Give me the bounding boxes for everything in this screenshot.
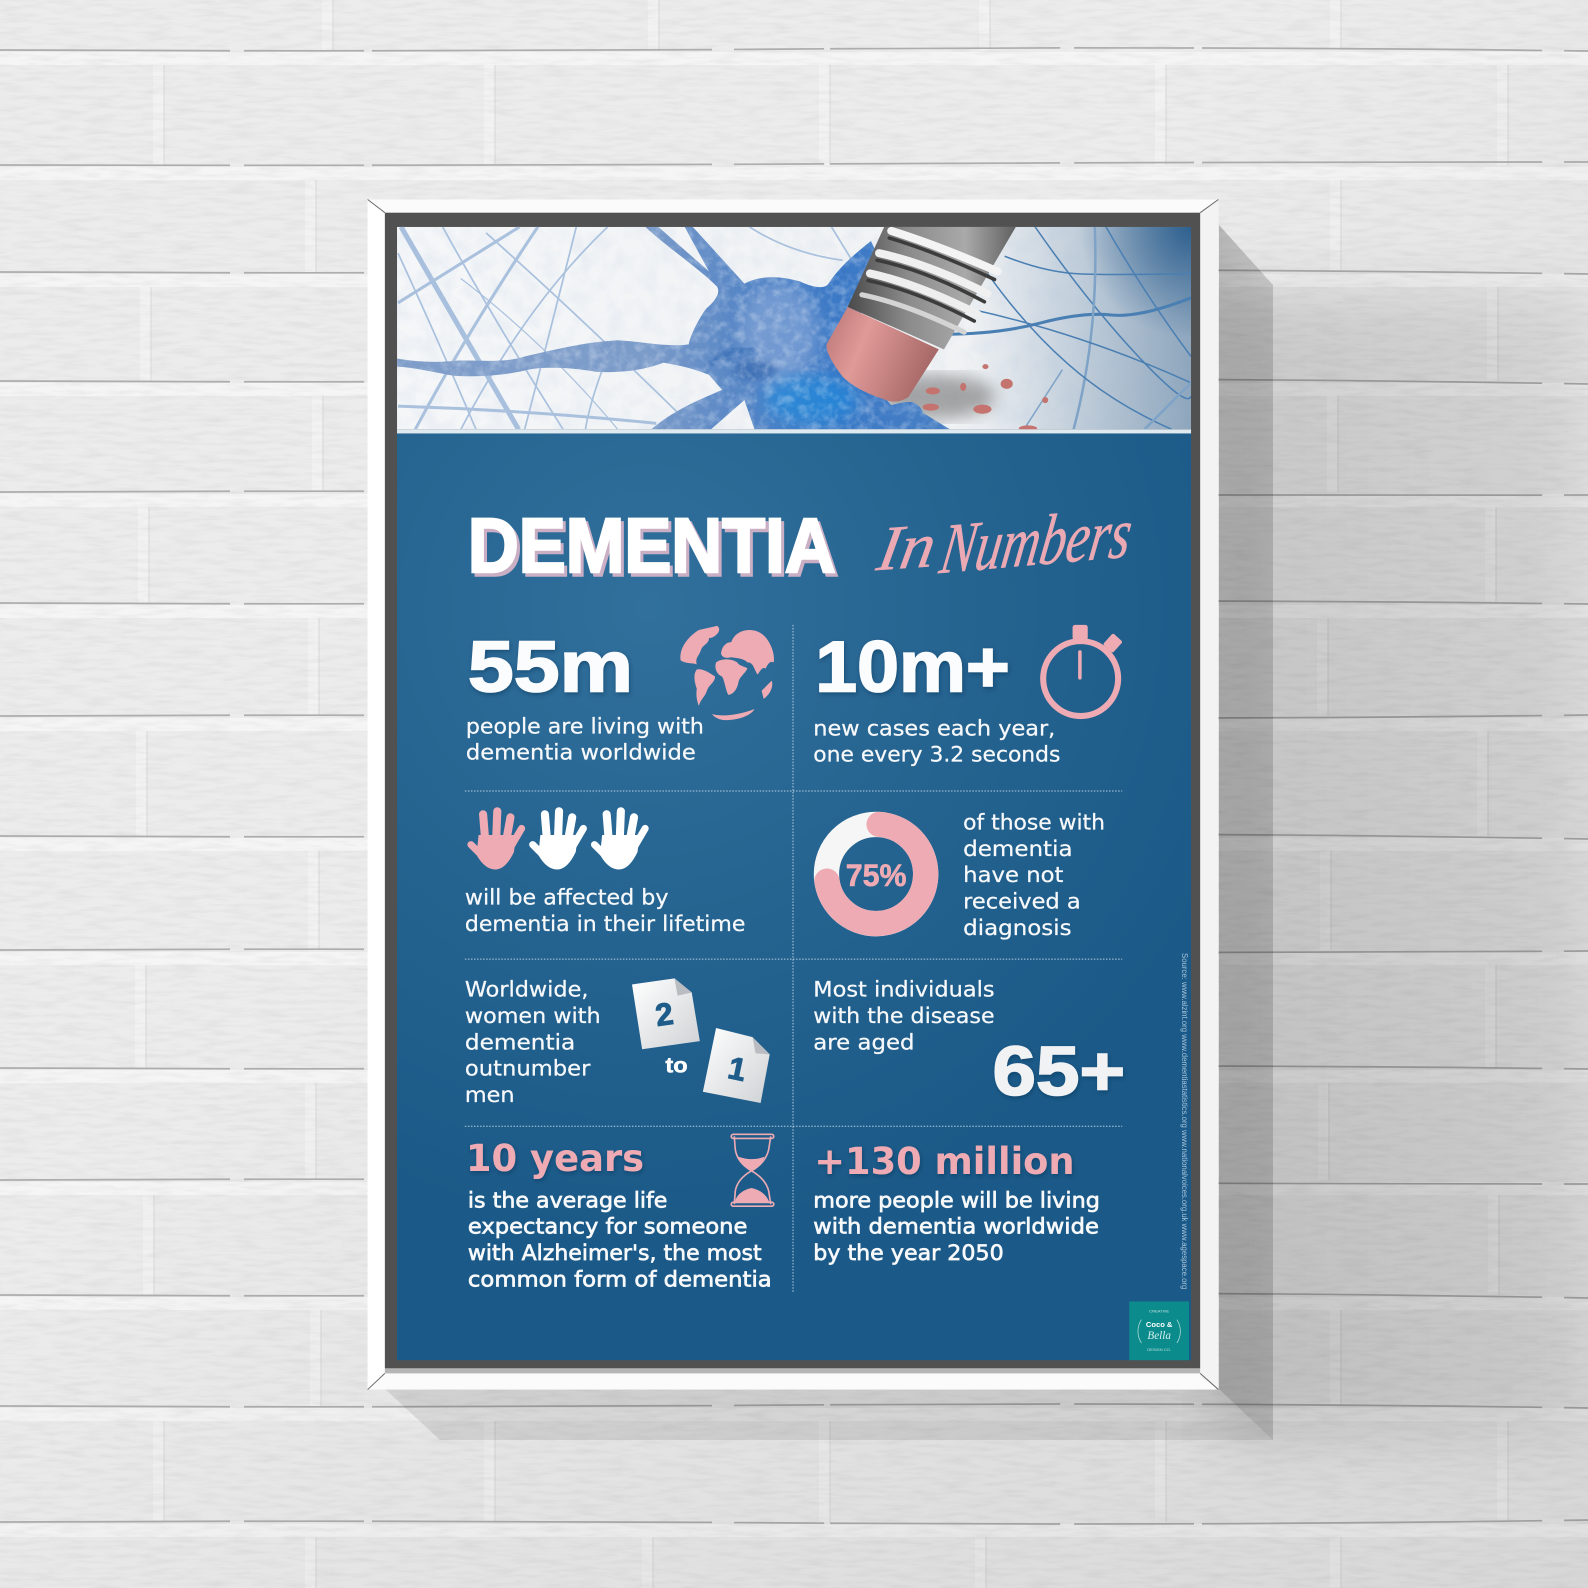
text: life expectancy (468, 1188, 772, 1292)
text: affected in lifetime: dementia in their lifetime (465, 912, 745, 937)
text: people living with dementia (466, 714, 704, 766)
donut chart: 75% (826, 824, 926, 924)
stat: 10 years: 10 years (466, 1136, 644, 1180)
logo: Coco and Bella: Bella (1147, 1330, 1171, 1342)
framed poster (368, 200, 1218, 1390)
eraser rubber tip (826, 307, 939, 402)
text: most individuals aged: Most individuals (813, 978, 995, 1003)
icon: 2 to 1 paper sheets (632, 978, 770, 1103)
grid dividers (465, 625, 1122, 1292)
stat: 10m+: 10m+ (815, 628, 1010, 708)
text: most individuals aged (813, 978, 995, 1055)
eraser crumbs (923, 364, 1048, 431)
text: not received a diagnosis: have not (963, 863, 1063, 888)
sheet: 1: 1 (725, 1050, 749, 1088)
text: not received a diagnosis: received a (963, 889, 1081, 914)
nerve fibres, left (398, 227, 854, 429)
text: most individuals aged: with the disease (813, 1004, 995, 1029)
icon: three hands (471, 811, 645, 869)
text: more people by 2050: more people will be living (813, 1188, 1100, 1213)
hand: white (533, 811, 583, 869)
header illustration: neuron and eraser (397, 227, 1194, 431)
white frame (368, 200, 1218, 1390)
text: people living with dementia: people are living with (466, 714, 704, 739)
hand: white (595, 811, 645, 869)
text: women outnumber men (465, 978, 601, 1108)
text: more people by 2050: with dementia worldwide (813, 1215, 1099, 1240)
text: not received a diagnosis: diagnosis (963, 916, 1072, 941)
neuron body (397, 227, 964, 429)
text: not received a diagnosis: dementia (963, 837, 1073, 862)
text: more people by 2050: by the year 2050 (813, 1241, 1004, 1266)
text: women outnumber men: women with (465, 1004, 601, 1029)
text: life expectancy: common form of dementia (468, 1267, 772, 1292)
nerve fibres, right (944, 227, 1194, 429)
logo: Coco and Bella: DESIGN CO. (1147, 1347, 1171, 1352)
subtitle: In Numbers (872, 492, 1138, 589)
frame cast shadow (385, 225, 1588, 1440)
text: people living with dementia: dementia worldwide (466, 741, 696, 766)
title: DEMENTIA: DEMENTIA (468, 503, 836, 589)
logo: Coco and Bella: CREATIVE (1149, 1309, 1169, 1314)
text: women outnumber men: men (465, 1083, 515, 1108)
stat: 55m: 55m (468, 628, 633, 708)
source note: Source: www.alzint.org www.dementiastatistics.org www.nationalvoices.org.uk www.agespace.org (1180, 953, 1189, 1289)
text: more people by 2050 (813, 1188, 1100, 1266)
text: women outnumber men: outnumber (465, 1057, 591, 1082)
logo: Coco and Bella (1129, 1301, 1189, 1360)
label: to: to (665, 1054, 688, 1078)
text: women outnumber men: dementia (465, 1030, 575, 1055)
blue content panel (397, 433, 1191, 1360)
sheet: 2: 2 (653, 996, 675, 1033)
donut chart: 75%: 75% (846, 858, 907, 893)
text: life expectancy: with Alzheimer's, the most (468, 1241, 762, 1266)
text: most individuals aged: are aged (813, 1030, 915, 1055)
icon: world globe (680, 626, 774, 720)
hand: pink (471, 811, 522, 869)
text: life expectancy: expectancy for someone (468, 1215, 747, 1240)
title: DEMENTIA: DEMENTIA (471, 506, 839, 592)
stat: 65+: 65+ (993, 1032, 1125, 1110)
stat: +130 million: +130 million (814, 1139, 1075, 1183)
eraser shadow (878, 375, 996, 419)
logo: Coco and Bella: Coco & (1146, 1320, 1173, 1329)
icon: stopwatch (1043, 625, 1123, 716)
subtitle: In Numbers: Numbers (935, 492, 1138, 589)
text: not received a diagnosis (963, 810, 1105, 941)
text: women outnumber men: Worldwide, (465, 978, 588, 1003)
text: new cases each year: new cases each year, (813, 716, 1055, 741)
white divider strip under illustration (397, 429, 1191, 433)
text: not received a diagnosis: of those with (963, 810, 1105, 835)
text: life expectancy: is the average life (468, 1188, 667, 1213)
text: affected in lifetime: will be affected by (465, 885, 668, 910)
pencil metal ferrule (848, 227, 1016, 349)
subtitle: In Numbers: In (872, 509, 942, 584)
icon: hourglass (731, 1134, 774, 1206)
text: new cases each year: one every 3.2 seconds (813, 743, 1060, 768)
text: new cases each year (813, 716, 1060, 768)
text: affected in lifetime (465, 885, 745, 937)
